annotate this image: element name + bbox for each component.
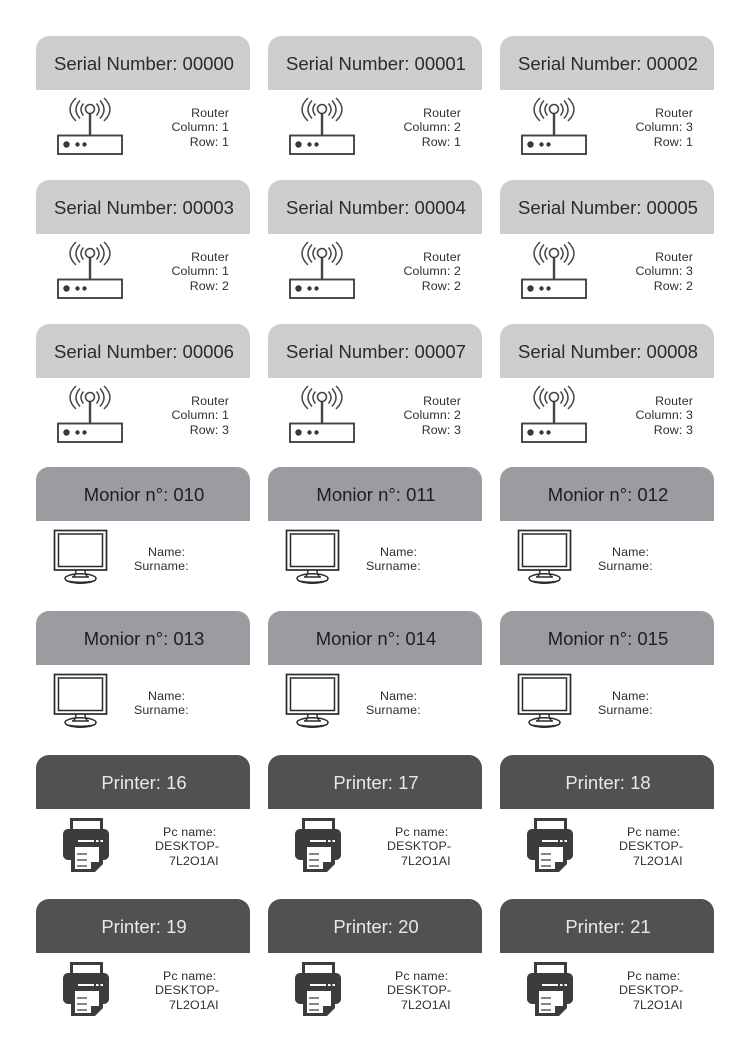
printer pc name: Pc name: bbox=[163, 969, 216, 983]
header: serial 00006: Serial Number: 00006 bbox=[54, 341, 234, 362]
router details: Row: 2 bbox=[654, 279, 693, 293]
router details: Column: 3 bbox=[635, 264, 693, 278]
printer pc name: 7L2O1AI bbox=[633, 998, 683, 1012]
header: serial 00001: Serial Number: 00001 bbox=[286, 53, 466, 74]
label card: monitor 010 bbox=[36, 467, 250, 584]
label card: printer 21 bbox=[500, 899, 714, 1021]
printer pc name bbox=[500, 755, 714, 877]
monitor owner fields: Surname: bbox=[366, 703, 421, 717]
header: printer 19: Printer: 19 bbox=[101, 916, 187, 937]
label card: serial 00006 bbox=[36, 324, 250, 443]
header: printer 16: Printer: 16 bbox=[101, 772, 187, 793]
printer pc name: 7L2O1AI bbox=[401, 998, 451, 1012]
icon: router bbox=[521, 386, 587, 443]
label card: serial 00001 bbox=[268, 36, 482, 155]
router details: Row: 1 bbox=[654, 135, 693, 149]
router details: Row: 1 bbox=[422, 135, 461, 149]
header: serial 00002: Serial Number: 00002 bbox=[518, 53, 698, 74]
printer pc name: 7L2O1AI bbox=[633, 854, 683, 868]
router details: Row: 2 bbox=[190, 279, 229, 293]
router details bbox=[171, 250, 229, 293]
label card: printer 16 bbox=[36, 755, 250, 877]
router details bbox=[171, 394, 229, 437]
router details: Router bbox=[191, 250, 229, 264]
printer pc name: Pc name: bbox=[163, 825, 216, 839]
monitor owner fields: Surname: bbox=[134, 703, 189, 717]
printer pc name: Pc name: bbox=[627, 969, 680, 983]
monitor owner fields: Name: bbox=[148, 689, 185, 703]
monitor owner fields: Surname: bbox=[598, 703, 653, 717]
printer pc name bbox=[268, 899, 482, 1021]
header: printer 17 bbox=[268, 755, 482, 809]
icon: printer bbox=[36, 809, 250, 877]
label card: printer 17 bbox=[268, 755, 482, 877]
monitor owner fields: Name: bbox=[612, 689, 649, 703]
header: serial 00006 bbox=[36, 324, 250, 378]
router details bbox=[635, 394, 693, 437]
label card: serial 00005 bbox=[500, 180, 714, 299]
monitor owner fields: Name: bbox=[612, 545, 649, 559]
header: printer 21 bbox=[500, 899, 714, 953]
router details: Column: 2 bbox=[403, 408, 461, 422]
header: monitor 010: Monior n°: 010 bbox=[84, 484, 204, 505]
printer pc name: DESKTOP- bbox=[619, 983, 683, 997]
header: printer 18: Printer: 18 bbox=[565, 772, 651, 793]
label card: serial 00004 bbox=[268, 180, 482, 299]
printer pc name: Pc name: bbox=[627, 825, 680, 839]
header: serial 00005 bbox=[500, 180, 714, 234]
icon: router bbox=[521, 242, 587, 299]
header: serial 00000: Serial Number: 00000 bbox=[54, 53, 234, 74]
router details bbox=[171, 106, 229, 149]
icon: printer bbox=[500, 953, 714, 1021]
printer pc name: DESKTOP- bbox=[155, 983, 219, 997]
icon: router bbox=[289, 386, 355, 443]
header: printer 18 bbox=[500, 755, 714, 809]
printer pc name: Pc name: bbox=[395, 825, 448, 839]
header: serial 00005: Serial Number: 00005 bbox=[518, 197, 698, 218]
router details bbox=[635, 106, 693, 149]
header: monitor 011 bbox=[268, 467, 482, 521]
header: printer 19 bbox=[36, 899, 250, 953]
header: serial 00004: Serial Number: 00004 bbox=[286, 197, 466, 218]
monitor owner fields bbox=[366, 545, 421, 573]
monitor owner fields: Name: bbox=[380, 689, 417, 703]
header: serial 00004 bbox=[268, 180, 482, 234]
icon: monitor bbox=[500, 665, 714, 733]
header: monitor 013 bbox=[36, 611, 250, 665]
printer pc name: 7L2O1AI bbox=[169, 998, 219, 1012]
header: serial 00002 bbox=[500, 36, 714, 90]
router details: Row: 3 bbox=[190, 423, 229, 437]
icon: printer bbox=[268, 809, 482, 877]
router details: Column: 3 bbox=[635, 408, 693, 422]
header: serial 00003: Serial Number: 00003 bbox=[54, 197, 234, 218]
label card: monitor 012 bbox=[500, 467, 714, 584]
label card: serial 00003 bbox=[36, 180, 250, 299]
icon: monitor bbox=[286, 530, 340, 584]
monitor owner fields bbox=[134, 545, 189, 573]
icon: router bbox=[289, 242, 355, 299]
router details: Router bbox=[423, 250, 461, 264]
header: serial 00007 bbox=[268, 324, 482, 378]
router details: Column: 1 bbox=[171, 120, 229, 134]
label card: serial 00000 bbox=[36, 36, 250, 155]
printer pc name: 7L2O1AI bbox=[169, 854, 219, 868]
label card: monitor 014 bbox=[268, 611, 482, 728]
router details: Column: 3 bbox=[635, 120, 693, 134]
router details: Row: 3 bbox=[422, 423, 461, 437]
router details: Router bbox=[423, 106, 461, 120]
printer pc name: DESKTOP- bbox=[387, 983, 451, 997]
router details: Router bbox=[655, 106, 693, 120]
header: serial 00008: Serial Number: 00008 bbox=[518, 341, 698, 362]
label card: printer 19 bbox=[36, 899, 250, 1021]
header: serial 00007: Serial Number: 00007 bbox=[286, 341, 466, 362]
router details: Column: 1 bbox=[171, 264, 229, 278]
icon: printer bbox=[268, 953, 482, 1021]
label card: serial 00008 bbox=[500, 324, 714, 443]
router details bbox=[635, 250, 693, 293]
router details: Column: 1 bbox=[171, 408, 229, 422]
printer pc name: DESKTOP- bbox=[155, 839, 219, 853]
header: monitor 012 bbox=[500, 467, 714, 521]
monitor owner fields: Surname: bbox=[598, 559, 653, 573]
router details: Router bbox=[655, 394, 693, 408]
icon: monitor bbox=[54, 674, 108, 728]
icon: router bbox=[57, 386, 123, 443]
header: serial 00001 bbox=[268, 36, 482, 90]
header: serial 00000 bbox=[36, 36, 250, 90]
header: printer 20 bbox=[268, 899, 482, 953]
icon: router bbox=[521, 98, 587, 155]
router details: Router bbox=[191, 106, 229, 120]
header: printer 16 bbox=[36, 755, 250, 809]
icon: printer bbox=[36, 953, 250, 1021]
icon: monitor bbox=[268, 665, 482, 733]
header: monitor 015: Monior n°: 015 bbox=[548, 628, 668, 649]
header: monitor 015 bbox=[500, 611, 714, 665]
monitor owner fields: Name: bbox=[380, 545, 417, 559]
router details: Router bbox=[191, 394, 229, 408]
icon: router bbox=[57, 242, 123, 299]
printer pc name: DESKTOP- bbox=[387, 839, 451, 853]
label card: monitor 015 bbox=[500, 611, 714, 733]
router details: Column: 2 bbox=[403, 120, 461, 134]
header: monitor 011: Monior n°: 011 bbox=[316, 484, 436, 505]
label card: serial 00002 bbox=[500, 36, 714, 155]
monitor owner fields bbox=[134, 689, 189, 717]
label card: serial 00007 bbox=[268, 324, 482, 443]
header: serial 00008 bbox=[500, 324, 714, 378]
header: monitor 014: Monior n°: 014 bbox=[316, 628, 436, 649]
label card: monitor 011 bbox=[268, 467, 482, 584]
router details: Column: 2 bbox=[403, 264, 461, 278]
printer pc name bbox=[36, 755, 250, 877]
monitor owner fields: Name: bbox=[148, 545, 185, 559]
router details: Row: 1 bbox=[190, 135, 229, 149]
header: monitor 014 bbox=[268, 611, 482, 665]
icon: monitor bbox=[54, 530, 108, 584]
printer pc name bbox=[268, 755, 482, 877]
monitor owner fields bbox=[268, 611, 482, 733]
router details: Router bbox=[655, 250, 693, 264]
router details bbox=[403, 250, 461, 293]
header: monitor 012: Monior n°: 012 bbox=[548, 484, 668, 505]
printer pc name bbox=[500, 899, 714, 1021]
router details: Row: 3 bbox=[654, 423, 693, 437]
printer pc name: DESKTOP- bbox=[619, 839, 683, 853]
header: printer 21: Printer: 21 bbox=[565, 916, 651, 937]
label card: printer 18 bbox=[500, 755, 714, 877]
printer pc name: Pc name: bbox=[395, 969, 448, 983]
icon: printer bbox=[500, 809, 714, 877]
router details bbox=[403, 394, 461, 437]
header: monitor 010 bbox=[36, 467, 250, 521]
printer pc name: 7L2O1AI bbox=[401, 854, 451, 868]
icon: monitor bbox=[518, 530, 572, 584]
header: monitor 013: Monior n°: 013 bbox=[84, 628, 204, 649]
label card: printer 20 bbox=[268, 899, 482, 1021]
printer pc name bbox=[36, 899, 250, 1021]
label card: monitor 013 bbox=[36, 611, 250, 728]
monitor owner fields bbox=[500, 611, 714, 733]
header: printer 20: Printer: 20 bbox=[333, 916, 419, 937]
header: serial 00003 bbox=[36, 180, 250, 234]
router details bbox=[403, 106, 461, 149]
router details: Router bbox=[423, 394, 461, 408]
monitor owner fields: Surname: bbox=[366, 559, 421, 573]
monitor owner fields: Surname: bbox=[134, 559, 189, 573]
router details: Row: 2 bbox=[422, 279, 461, 293]
monitor owner fields bbox=[598, 545, 653, 573]
icon: router bbox=[289, 98, 355, 155]
icon: router bbox=[57, 98, 123, 155]
header: printer 17: Printer: 17 bbox=[333, 772, 419, 793]
